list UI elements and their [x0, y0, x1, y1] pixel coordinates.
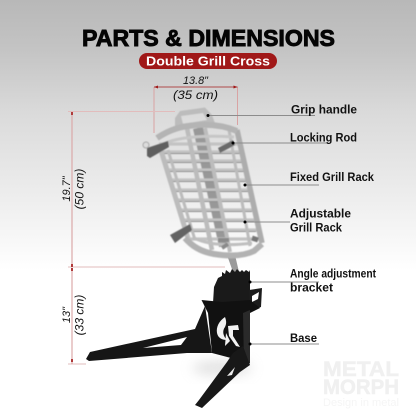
watermark: Metal Morph: METAL	[323, 358, 399, 381]
height dimension: grill 19.7 inch / 50 cm	[61, 112, 225, 267]
rungs	[159, 144, 259, 239]
leader: locking rod	[232, 142, 327, 144]
label: adjustable grill rack: Adjustable	[290, 208, 351, 220]
height dimension: base 13 inch / 33 cm: (33 cm)	[72, 295, 86, 335]
front leg	[195, 346, 250, 408]
leader: angle adjustment bracket	[248, 280, 319, 284]
support stem	[227, 255, 239, 272]
base stand	[86, 269, 262, 408]
lock hardware	[147, 141, 169, 158]
angle adjustment bracket	[213, 269, 250, 303]
grill rack assembly	[143, 108, 262, 255]
label: adjustable grill rack	[290, 208, 351, 234]
leader: base	[248, 342, 319, 346]
leader: adjustable grill rack	[244, 220, 290, 224]
rails	[159, 128, 262, 252]
label: angle adjustment bracket	[290, 268, 376, 294]
watermark: Metal Morph	[323, 358, 399, 409]
label: base: Base	[290, 333, 317, 345]
watermark: Metal Morph: MORPH	[323, 376, 399, 399]
label: adjustable grill rack: Grill Rack	[290, 222, 343, 234]
height dimension: base 13 inch / 33 cm	[61, 268, 86, 364]
label: locking rod: Locking Rod	[290, 132, 357, 144]
left leg	[86, 306, 212, 361]
height dimension: grill 19.7 inch / 50 cm: (50 cm)	[72, 169, 86, 209]
height dimension: grill 19.7 inch / 50 cm: 19.7"	[61, 175, 73, 202]
main plate	[202, 300, 260, 363]
leader: fixed grill rack	[244, 184, 319, 186]
label: angle adjustment bracket: bracket	[290, 282, 333, 294]
height dimension: base 13 inch / 33 cm: 13"	[61, 306, 73, 323]
width dimension: 13.8 inch / 35 cm: 13.8"	[183, 75, 209, 87]
ground shadow	[192, 360, 252, 376]
width dimension: 13.8 inch / 35 cm: (35 cm)	[173, 88, 218, 102]
top frame arc	[157, 125, 237, 138]
grip handle	[175, 108, 216, 128]
watermark: Metal Morph: Design in metal	[323, 397, 399, 409]
side plate	[243, 310, 250, 366]
bracket tab	[249, 288, 262, 311]
label: grip handle: Grip handle	[291, 104, 357, 116]
logo mark	[217, 317, 240, 347]
central spine	[198, 128, 224, 246]
label: fixed grill rack: Fixed Grill Rack	[290, 172, 375, 184]
label: angle adjustment bracket: Angle adjustment	[290, 268, 376, 280]
leader: grip handle	[206, 114, 315, 117]
bottom frame arc	[185, 238, 262, 255]
subtitle pill: Double Grill Cross	[146, 54, 270, 68]
title: PARTS & DIMENSIONS	[82, 25, 335, 51]
width dimension: 13.8 inch / 35 cm	[154, 75, 238, 133]
